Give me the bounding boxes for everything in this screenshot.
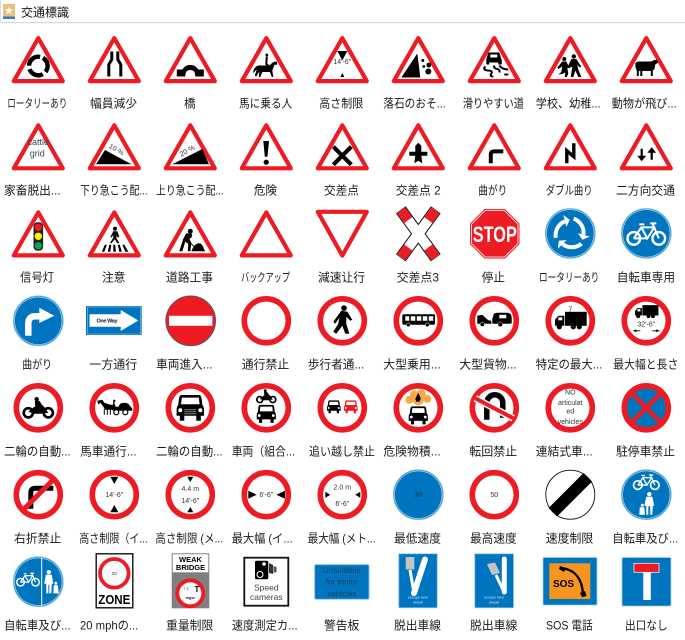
sign: no entry <box>156 296 216 372</box>
sign: steep ascent: 20 % <box>179 144 196 158</box>
sign: escape lane right <box>470 554 517 632</box>
sign: no articulated vehicles: 連結式車... <box>536 444 593 458</box>
sign: no through road <box>622 557 671 632</box>
sign: cattle grid: cattle <box>28 137 49 147</box>
row 1 signs <box>7 38 677 110</box>
sign: escape lane right: ahead <box>489 600 499 604</box>
sign: no buses: 大型乗用... <box>383 358 441 372</box>
sign: no pedestrians <box>308 299 364 372</box>
heading: 交通標識 <box>21 6 69 20</box>
sign: double bend <box>546 125 595 198</box>
sign: steep descent: 10 % <box>107 143 125 157</box>
sign: no vehicles combination <box>232 386 295 458</box>
sign: height limit metric <box>155 473 223 546</box>
sign: max width and length: 最大幅と長さ <box>613 356 678 372</box>
title bar <box>0 0 685 23</box>
sign: minimum speed: 最低速度 <box>394 532 441 546</box>
sign: SOS telephone: SOS 電話 <box>546 618 593 632</box>
sign: max width imperial: 最大幅 (イ... <box>232 530 293 546</box>
sign: mandatory roundabout: ロータリーあり <box>539 270 599 284</box>
sign: no traffic: 通行禁止 <box>242 358 289 372</box>
sign: height limit metric: 4.4 m <box>182 486 199 493</box>
sign: horse rider: 馬に乗る人 <box>239 96 292 110</box>
sign: warning board <box>315 565 369 632</box>
sign: road works <box>166 212 215 284</box>
sign: max width metric: 2.0 m <box>334 485 351 492</box>
sign: crossroads <box>318 125 367 198</box>
sign: no U-turn <box>469 386 517 458</box>
sign: speed cameras: 速度測定カ... <box>232 618 298 632</box>
sign: mandatory roundabout <box>539 209 599 284</box>
sign: steep ascent: 上り急こう配... <box>156 182 224 198</box>
sign: steep descent: 下り急こう配... <box>80 182 148 198</box>
sign: road works: 道路工事 <box>166 270 213 284</box>
sign: no explosives: 危険物積... <box>383 444 441 458</box>
sign: no articulated vehicles: ed <box>566 408 574 415</box>
sign: height limit imperial: 14'-6" <box>105 492 124 499</box>
sign: two-way traffic: 二方向交通 <box>616 182 675 198</box>
icon: star stencil <box>3 4 15 19</box>
row 7 signs <box>4 553 671 632</box>
sign: no towed caravans: 大型貨物... <box>459 356 517 372</box>
sign: turn right ahead: 曲がり <box>22 356 52 372</box>
sign: cattle grid: grid <box>30 149 45 159</box>
sign: height limit <box>318 38 367 110</box>
sign: no buses <box>383 299 441 372</box>
sign: speed cameras <box>232 558 298 632</box>
sign: pedestrian crossing: 注意 <box>102 270 125 284</box>
sign: minimum speed <box>394 470 443 546</box>
sign: bend <box>470 125 519 198</box>
sign: escape lane left: escape lane <box>408 596 428 600</box>
sign: school children: 学校、幼稚... <box>536 96 601 110</box>
sign: height limit: 14'-6" <box>333 59 352 66</box>
sign: slippery road: 滑りやすい道 <box>463 96 524 110</box>
sign: cycles only: 自転車専用 <box>617 270 675 284</box>
sign: max width imperial: 6'-6" <box>259 492 274 499</box>
sign: steep descent <box>80 125 148 198</box>
sign: no motorcycles <box>4 386 71 458</box>
sign: no motor vehicles <box>156 386 223 458</box>
sign: no overtaking: 追い越し禁止 <box>309 444 375 458</box>
sign: max width and length: 32'-6" <box>637 321 656 328</box>
sign: cattle grid <box>4 125 63 198</box>
sign: max width and length <box>613 299 678 372</box>
sign: cycles and pedestrians shared <box>612 470 678 546</box>
sign: max width metric: 最大幅 (メト... <box>308 530 376 546</box>
sign: no towed caravans <box>459 299 517 372</box>
sign: danger: 危険 <box>254 184 277 198</box>
sign: wild animals <box>612 38 677 110</box>
sign: level crossing cross <box>397 210 439 284</box>
sign: danger <box>242 125 291 198</box>
sign: weak bridge weight limit: BRIDGE <box>176 563 205 572</box>
sign: pedestrian crossing <box>90 212 139 284</box>
sign: back up <box>241 212 291 284</box>
sign: escape lane left: ahead <box>413 600 423 604</box>
sign: wild animals: 動物が飛び... <box>612 96 677 110</box>
sign: stop <box>470 209 520 284</box>
sign: weak bridge weight limit: mgw <box>185 595 195 600</box>
sign: segregated cycle and pedestrian: 自転車及び... <box>4 618 71 632</box>
sign: one way <box>86 306 142 372</box>
sign: warning board: 警告板 <box>324 618 359 632</box>
sign: one way: 一方通行 <box>89 356 137 372</box>
sign: max width imperial <box>232 473 293 546</box>
sign: weak bridge weight limit: T <box>195 585 200 594</box>
sign: maximum speed: 50 <box>490 492 498 499</box>
sign: speed cameras: Speed <box>254 582 279 592</box>
row 6 signs <box>14 470 678 546</box>
sign: no motorcycles: 二輪の自動... <box>4 444 71 458</box>
sign: no pedestrians: 歩行者通... <box>308 356 364 372</box>
sign: slippery road <box>463 38 524 110</box>
sign: 20 mph zone: 20 mphの... <box>80 618 138 632</box>
sign: height limit imperial <box>79 473 148 546</box>
sign: escape lane left <box>394 554 441 632</box>
sign: minimum speed: 30 <box>414 492 422 499</box>
sign: weak bridge weight limit: 7.5 <box>184 587 188 591</box>
sign: cattle grid: 家畜脱出... <box>4 182 61 198</box>
sign: stop: STOP <box>473 222 517 247</box>
sign: max gross weight <box>536 299 602 372</box>
sign: weak bridge weight limit <box>166 553 213 632</box>
sign: 20 mph zone <box>80 554 138 632</box>
sign: 20 mph zone: 20 <box>112 571 117 576</box>
sign: no horse carts <box>80 386 137 458</box>
sign: no articulated vehicles: articulat <box>558 400 583 407</box>
sign: road narrows: 幅員減少 <box>90 96 137 110</box>
sign: no right turn: 右折禁止 <box>14 530 61 546</box>
sign: SOS telephone <box>543 557 597 632</box>
sign: no right turn <box>14 473 61 546</box>
sign: no traffic <box>242 299 289 372</box>
sign: 20 mph zone: ZONE <box>98 592 131 607</box>
sign: weak bridge weight limit: WEAK <box>179 555 203 564</box>
sign: level crossing cross: 交差点3 <box>397 270 439 284</box>
sign: escape lane right: 脱出車線 <box>470 618 517 632</box>
sign: max gross weight: 7 <box>568 306 572 313</box>
row 2 signs <box>4 125 675 198</box>
sign: warning board: vehicles <box>327 590 356 598</box>
sign: no horse carts: 馬車通行... <box>80 444 137 458</box>
sign: height limit: 高さ制限 <box>319 96 363 110</box>
sign: double bend: ダブル曲り <box>546 182 593 198</box>
sign: national speed limit <box>546 470 595 546</box>
sign: back up: バックアップ <box>241 270 290 284</box>
sign: horse rider <box>239 38 292 110</box>
sign: segregated cycle and pedestrian <box>4 557 71 632</box>
sign: no articulated vehicles: NO <box>565 389 576 396</box>
sign: max gross weight: 5 <box>570 323 574 330</box>
sign: road narrows <box>90 38 139 110</box>
sign: crossroads 2 <box>394 125 443 198</box>
sign: falling rocks: 落石のおそ... <box>383 96 446 110</box>
sign: height limit metric: 高さ制限 (メ... <box>155 532 223 546</box>
sign: no through road: 出口なし <box>625 618 668 632</box>
sign: give way: 減速让行 <box>318 270 365 284</box>
sign: no articulated vehicles: vehicles <box>558 419 583 426</box>
sign: height limit imperial: 高さ制限（イ... <box>79 532 148 546</box>
sign: no vehicles combination: 車両（組合... <box>232 444 295 458</box>
sign: school children <box>536 38 601 110</box>
sign: bend: 曲がり <box>478 182 507 198</box>
sign: give way <box>318 212 367 284</box>
sign: no stopping <box>616 386 675 458</box>
sign: maximum speed <box>470 473 517 546</box>
sign: steep ascent <box>156 125 224 198</box>
sign: national speed limit: 速度制限 <box>546 532 593 546</box>
sign: no U-turn: 転回禁止 <box>469 444 517 458</box>
sign: two-way traffic <box>616 125 675 198</box>
sign: speed cameras: cameras <box>250 592 283 602</box>
sign: max width metric <box>308 473 376 546</box>
sign: stop: 停止 <box>482 270 505 284</box>
sign: maximum speed: 最高速度 <box>470 532 517 546</box>
sign: warning board: Unsuitable <box>323 566 361 575</box>
row 3 signs <box>14 209 675 284</box>
sign: no motor vehicles: 二輪の自動... <box>156 444 223 458</box>
sign: escape lane right: escape lane <box>484 596 504 600</box>
sign: cycles only <box>617 209 675 284</box>
sign: traffic signal <box>14 212 63 284</box>
sign: no overtaking <box>309 386 375 458</box>
sign: bridge: 橋 <box>184 96 196 110</box>
sign: max gross weight: 特定の最大... <box>536 356 602 372</box>
sign: crossroads: 交差点 <box>324 184 359 198</box>
sign: cycles and pedestrians shared: 自転車及び... <box>612 532 678 546</box>
sign: no entry: 車両進入... <box>156 358 213 372</box>
sign: no explosives <box>383 386 441 458</box>
sign: turn right ahead <box>14 296 63 372</box>
sign: max width metric: 6'-6" <box>335 501 350 508</box>
sign: warning board: for motor <box>326 578 358 586</box>
sign: crossroads 2: 交差点 2 <box>396 184 441 198</box>
sign: weak bridge weight limit: 重量制限 <box>166 618 213 632</box>
sign: height limit metric: 14'-6" <box>181 498 200 505</box>
row 5 signs <box>4 386 675 458</box>
sign: no stopping: 駐停車禁止 <box>616 444 675 458</box>
sign: roundabout ahead <box>7 38 67 110</box>
sign: roundabout ahead: ロータリーあり <box>7 96 67 110</box>
row 4 signs <box>14 296 678 372</box>
sign: one way: One Way <box>96 318 118 324</box>
sign: escape lane left: 脱出車線 <box>394 618 441 632</box>
sign: SOS telephone: SOS <box>553 579 574 590</box>
sign: traffic signal: 信号灯 <box>20 270 54 284</box>
sign: bridge <box>166 38 215 110</box>
sign: falling rocks <box>383 38 446 110</box>
sign: no articulated vehicles <box>536 386 593 458</box>
